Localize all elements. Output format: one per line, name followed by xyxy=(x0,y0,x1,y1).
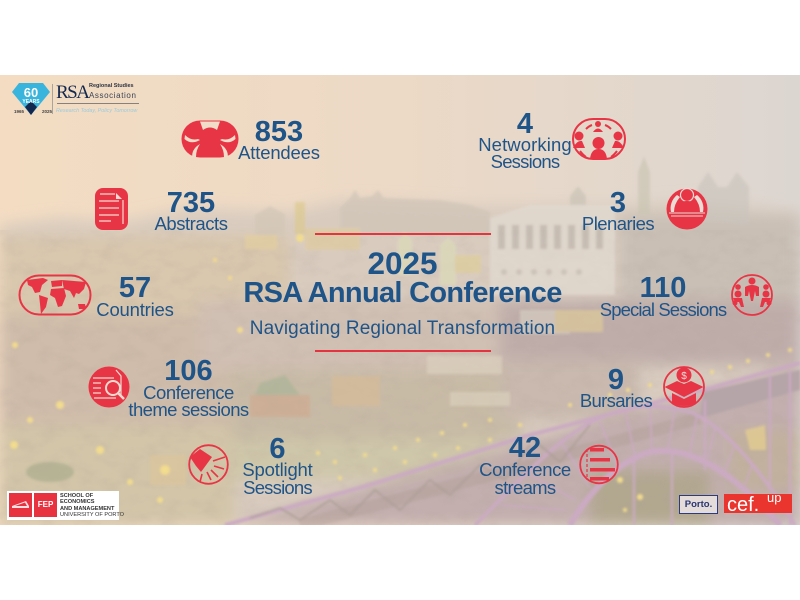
stat: special sessions: Special Sessions xyxy=(600,299,726,320)
stat: attendees: Attendees xyxy=(238,142,320,163)
logo rule xyxy=(57,103,139,104)
FEP text: AND MANAGEMENT xyxy=(60,506,114,512)
icon: streams list xyxy=(579,444,619,484)
icon: bursary graduation cap: $ xyxy=(681,371,687,382)
FEP text xyxy=(60,493,124,518)
stat: special sessions: 110 xyxy=(640,272,686,304)
stat: networking sessions: Networking xyxy=(478,134,572,155)
city lights xyxy=(10,234,792,512)
stat: bursaries xyxy=(580,364,652,411)
stat: conference theme sessions: 106 xyxy=(164,355,213,387)
stat: spotlight sessions: Spotlight xyxy=(242,459,313,480)
stat: plenaries: 3 xyxy=(610,187,626,219)
logo: Porto: Porto. xyxy=(685,499,712,510)
stat: conference streams: 42 xyxy=(509,432,541,464)
bridge deck truss and arch xyxy=(225,363,800,525)
stat: abstracts: Abstracts xyxy=(154,213,228,234)
icon: diamond 60 years: 60 xyxy=(24,85,38,100)
FEP red block xyxy=(34,493,57,517)
stat: abstracts xyxy=(154,187,228,234)
logo years: 2025 xyxy=(42,108,52,114)
stat: special sessions xyxy=(600,272,726,320)
logo divider xyxy=(52,84,53,114)
logo tagline: Research Today, Policy Tomorrow xyxy=(56,108,137,114)
FEP red block: FEP xyxy=(38,500,53,509)
stat: countries xyxy=(96,272,174,320)
buildings skyline xyxy=(26,156,749,485)
stat: conference streams: streams xyxy=(495,477,555,498)
logo wordmark: Regional Studies xyxy=(89,83,134,89)
icon: spotlight xyxy=(188,444,229,485)
stat: networking sessions: 4 xyxy=(517,108,533,140)
icon: magnifier on document xyxy=(88,366,130,408)
stat: spotlight sessions: Sessions xyxy=(243,477,312,498)
stat: conference streams: Conference xyxy=(479,459,571,480)
stat: attendees: 853 xyxy=(255,116,303,148)
center bottom rule xyxy=(315,350,491,352)
stat: conference theme sessions xyxy=(128,355,249,420)
stat: bursaries: 9 xyxy=(608,364,624,396)
background: blurred Porto cityscape xyxy=(0,75,800,525)
icon: document xyxy=(95,188,128,230)
stat: abstracts: 735 xyxy=(167,187,215,219)
stat: conference theme sessions: theme sessions xyxy=(128,399,249,420)
mottled town texture xyxy=(0,230,800,525)
stat: plenaries xyxy=(582,187,654,234)
yellow house under bridge xyxy=(745,425,766,450)
icon: attendees group xyxy=(182,120,238,158)
stat: attendees xyxy=(238,116,320,163)
FEP text: SCHOOL OF xyxy=(60,493,93,499)
logo: Porto xyxy=(679,495,718,514)
center top rule xyxy=(315,233,491,235)
stat: countries: Countries xyxy=(96,299,174,320)
year heading: 2025 xyxy=(367,245,438,281)
icon: networking xyxy=(572,118,626,160)
stat: conference theme sessions: Conference xyxy=(143,382,234,403)
FEP text: ECONOMICS xyxy=(60,499,94,505)
large tonal areas xyxy=(0,200,800,525)
logo: RSA 60 years xyxy=(12,82,139,115)
stat: conference streams xyxy=(479,432,571,498)
logo RSA letters: RSA xyxy=(56,82,88,103)
logo: cef.up xyxy=(724,494,792,513)
FEP red left block xyxy=(9,493,32,517)
logo association: Association xyxy=(89,91,137,100)
icon: diamond 60 years xyxy=(12,83,50,115)
icon: diamond 60 years: YEARS xyxy=(22,99,40,105)
icon: plenary speaker xyxy=(666,188,708,230)
logo years: 1965 xyxy=(14,108,24,114)
stat: spotlight sessions xyxy=(242,433,313,498)
stat: plenaries: Plenaries xyxy=(582,213,654,234)
stat: bursaries: Bursaries xyxy=(580,390,652,411)
icon: world map xyxy=(18,274,92,316)
stat: networking sessions xyxy=(478,108,572,172)
stat: spotlight sessions: 6 xyxy=(269,433,286,465)
center title block xyxy=(243,233,562,352)
icon: bursary graduation cap xyxy=(663,366,705,408)
FEP text: UNIVERSITY OF PORTO xyxy=(60,512,124,518)
icon: meeting table xyxy=(731,274,773,316)
conference title: RSA Annual Conference xyxy=(243,277,562,309)
stat: countries: 57 xyxy=(119,272,151,304)
stat: networking sessions: Sessions xyxy=(491,151,559,172)
logo years xyxy=(14,108,52,114)
theme subtitle: Navigating Regional Transformation xyxy=(250,318,555,339)
logo: FEP school xyxy=(7,491,119,520)
